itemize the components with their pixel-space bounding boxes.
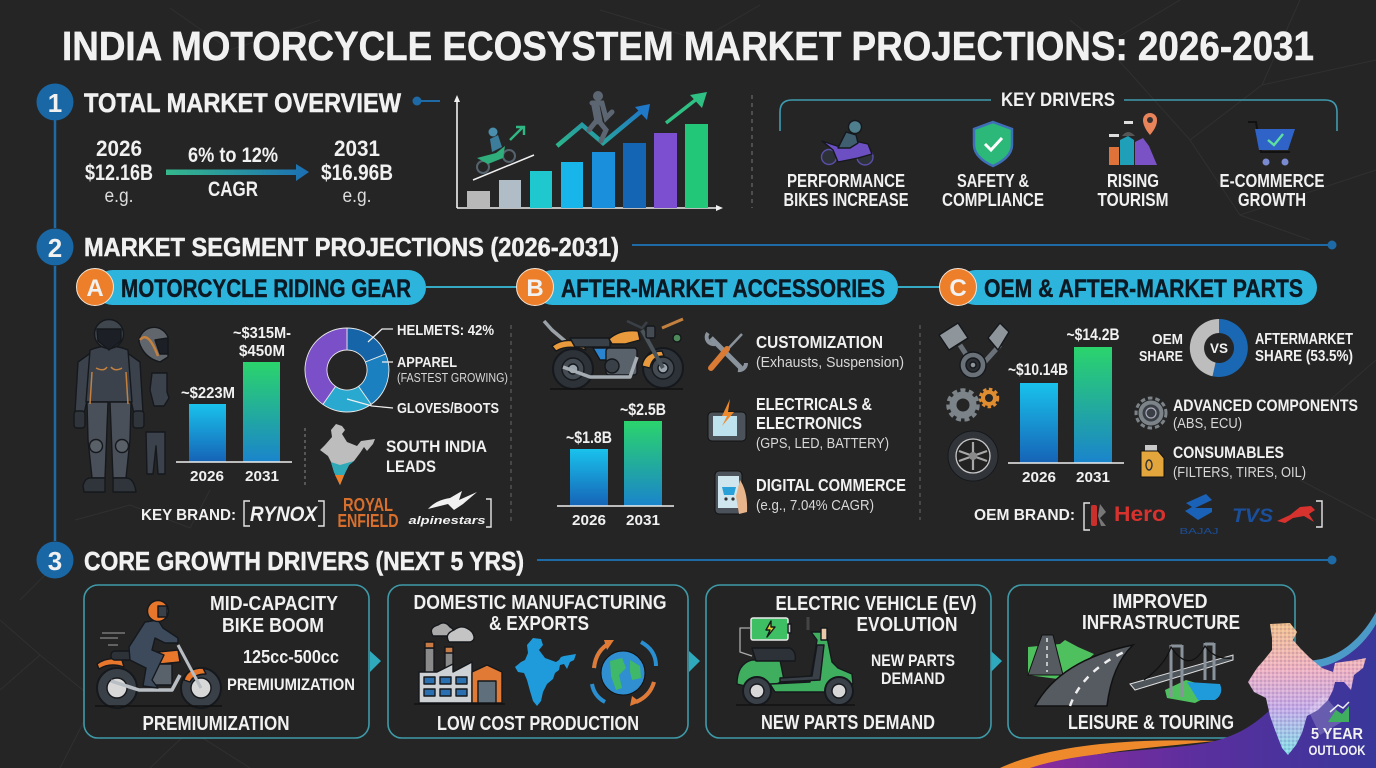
OEM brand row: OEM BRAND: <box>974 507 1075 524</box>
card: mid-capacity bike boom: MID-CAPACITY <box>210 593 339 615</box>
key brand row: KEY BRAND: <box>141 507 236 524</box>
CAGR arrow: CAGR <box>208 178 258 201</box>
icon: component gear <box>1136 398 1166 428</box>
customization item: (Exhausts, Suspension) <box>756 354 904 371</box>
section 3 rule <box>537 556 1336 564</box>
south india leads map: SOUTH INDIA <box>386 437 487 456</box>
card: improved infrastructure: IMPROVED <box>1112 591 1208 613</box>
consumables item <box>1141 443 1306 481</box>
driver: performance bikes: BIKES INCREASE <box>784 190 908 210</box>
accessories bar chart <box>557 401 674 529</box>
accessories bar chart: 2031 <box>626 513 660 529</box>
2026 value <box>85 136 153 207</box>
key drivers panel <box>780 90 1337 210</box>
brand: Hero <box>1091 503 1166 526</box>
section 1 badge <box>36 84 74 120</box>
icon: glove <box>150 373 169 406</box>
card: electric vehicle evolution: ELECTRIC VEHICLE (EV) <box>776 593 976 615</box>
brand: Alpinestars <box>408 491 486 527</box>
card: domestic manufacturing and exports: LOW COST PRODUCTION <box>437 713 639 735</box>
icon: factory <box>414 623 505 704</box>
CAGR arrow <box>166 144 309 201</box>
riding gear bar chart: 2026 <box>190 469 224 485</box>
parts bar chart: ~$14.2B <box>1066 326 1120 344</box>
panel C header: C <box>949 275 967 302</box>
brand: Bajaj <box>1180 494 1218 536</box>
key brand row <box>141 491 491 531</box>
riding gear bar chart <box>176 325 292 485</box>
panel A header: MOTORCYCLE RIDING GEAR <box>121 275 411 303</box>
2026 value: 2026 <box>96 136 142 161</box>
advanced components item: (ABS, ECU) <box>1173 416 1242 432</box>
riding gear bar chart: 2031 <box>245 469 279 485</box>
section 1: total market overview <box>36 84 723 211</box>
OEM vs aftermarket donut <box>1139 319 1353 377</box>
driver: rising tourism: TOURISM <box>1098 190 1168 210</box>
electricals item: ELECTRICALS & <box>756 394 872 414</box>
card: domestic manufacturing and exports: & EXPORTS <box>489 613 589 635</box>
driver: safety and compliance: COMPLIANCE <box>942 190 1044 210</box>
driver: rising tourism <box>1098 113 1168 210</box>
customization item <box>707 332 904 371</box>
driver: performance bikes <box>784 120 908 210</box>
card arrow 2 <box>689 651 700 672</box>
2031 value: 2031 <box>334 136 380 161</box>
accessories bar chart: ~$1.8B <box>566 429 612 447</box>
south india leads map: LEADS <box>386 457 436 476</box>
gear share donut chart: HELMETS: 42% <box>397 322 494 339</box>
brand: Hero: Hero <box>1114 503 1166 526</box>
OEM vs aftermarket donut: SHARE <box>1139 348 1183 365</box>
2031 value: e.g. <box>342 186 372 207</box>
riding gear bar chart: ~$315M- <box>233 325 291 342</box>
brand: Bajaj: BAJAJ <box>1180 526 1218 536</box>
OEM brand row <box>974 494 1322 536</box>
section 3: core growth drivers <box>36 542 1336 578</box>
card: improved infrastructure: INFRASTRUCTURE <box>1082 612 1240 634</box>
panel A header <box>76 268 426 306</box>
OEM vs aftermarket donut: AFTERMARKET <box>1255 331 1353 348</box>
icon: helmet <box>139 327 168 362</box>
card: electric vehicle evolution: NEW PARTS DEMAND <box>761 712 935 734</box>
gear share donut chart: APPAREL <box>397 354 457 371</box>
brand: TVS <box>1232 506 1315 527</box>
key drivers heading: KEY DRIVERS <box>1001 90 1115 111</box>
panel A header: A <box>86 275 104 302</box>
icon: highway roads <box>1028 635 1133 706</box>
card: electric vehicle evolution: NEW PARTS <box>871 651 955 670</box>
icon: oil jug <box>1141 445 1164 477</box>
card: electric vehicle evolution: EVOLUTION <box>856 614 958 636</box>
icon: phone with cart <box>715 471 747 514</box>
icon: rider on motorcycle <box>95 600 222 708</box>
riding gear bar chart: ~$223M <box>181 385 235 402</box>
icon: pants <box>146 432 165 474</box>
panel B header: AFTER-MARKET ACCESSORIES <box>561 275 885 303</box>
section 3 badge: 3 <box>48 546 62 576</box>
icon: tire <box>948 431 998 481</box>
OEM vs aftermarket donut: VS <box>1210 341 1228 356</box>
panel C header <box>940 268 1317 306</box>
driver: performance bikes: PERFORMANCE <box>787 171 905 191</box>
card: domestic manufacturing and exports: DOMESTIC MANUFACTURING <box>414 592 666 614</box>
card: improved infrastructure: LEISURE & TOURING <box>1068 712 1234 734</box>
brand: Royal Enfield: ROYAL <box>343 495 393 515</box>
corner swoosh with five year outlook <box>1000 612 1376 768</box>
2031 value <box>321 136 393 207</box>
south india leads map <box>320 424 487 485</box>
driver: safety and compliance: SAFETY & <box>957 171 1029 191</box>
icon: electric scooter with battery <box>736 617 855 705</box>
driver: e-commerce growth: GROWTH <box>1238 190 1306 210</box>
parts bar chart: 2026 <box>1022 470 1056 486</box>
timeline spine <box>54 120 56 541</box>
card arrow 3 <box>991 651 1002 672</box>
five year outlook label <box>1308 726 1366 758</box>
driver: e-commerce growth: E-COMMERCE <box>1220 171 1324 191</box>
card: mid-capacity bike boom: BIKE BOOM <box>222 615 324 637</box>
panel C: OEM and after-market parts <box>939 268 1358 536</box>
icon: bridge <box>1130 643 1233 703</box>
growth bar chart <box>454 91 723 211</box>
icon: custom motorcycle <box>544 319 683 389</box>
section 2 rule <box>632 240 1336 250</box>
heading connector <box>412 96 440 106</box>
icon: India map blue <box>515 638 576 706</box>
section 3 badge <box>36 542 74 578</box>
section 2 badge: 2 <box>48 233 62 263</box>
driver: rising tourism: RISING <box>1107 171 1159 191</box>
panel C header: OEM & AFTER-MARKET PARTS <box>984 275 1303 303</box>
brand: Royal Enfield <box>338 495 398 531</box>
parts bar chart: 2031 <box>1076 470 1110 486</box>
decorative corner wave <box>1000 612 1376 768</box>
brand: Royal Enfield: ENFIELD <box>338 511 398 531</box>
digital commerce item <box>715 471 906 514</box>
riding gear bar chart: $450M <box>239 343 285 360</box>
card: electric vehicle evolution: DEMAND <box>881 669 945 688</box>
section 3 heading: CORE GROWTH DRIVERS (NEXT 5 YRS) <box>84 546 524 576</box>
card: mid-capacity bike boom <box>84 585 369 738</box>
section 1 heading: TOTAL MARKET OVERVIEW <box>84 88 401 118</box>
gear share donut chart: (FASTEST GROWING) <box>397 371 508 385</box>
icon: globe with arrows <box>592 640 656 706</box>
parts bar chart: ~$10.14B <box>1008 361 1068 379</box>
icon: pointillist India map <box>1248 623 1366 755</box>
icon: rising arrow with runner <box>557 91 650 146</box>
electricals item: (GPS, LED, BATTERY) <box>756 435 889 452</box>
icon: wrench and screwdriver <box>707 333 746 370</box>
card: domestic manufacturing and exports <box>388 585 688 738</box>
2026 value: e.g. <box>104 186 134 207</box>
digital commerce item: DIGITAL COMMERCE <box>756 475 906 495</box>
icon: outlook mini chart <box>1308 695 1349 735</box>
gear share donut chart: GLOVES/BOOTS <box>397 400 499 417</box>
icon: gears <box>948 389 998 420</box>
brand: Alpinestars: alpinestars <box>408 515 486 527</box>
section 2: market segment projections <box>36 228 1336 266</box>
section 2 heading: MARKET SEGMENT PROJECTIONS (2026-2031) <box>84 232 619 262</box>
card arrow 1 <box>370 651 381 672</box>
icon: rider on ramp <box>473 127 534 180</box>
driver: safety and compliance <box>942 122 1044 210</box>
icon: pistons and crank <box>939 323 1009 378</box>
advanced components item <box>1136 396 1358 432</box>
panel B header <box>516 268 898 306</box>
icon: riding suit <box>74 320 144 492</box>
gear share donut chart <box>305 322 508 417</box>
consumables item: (FILTERS, TIRES, OIL) <box>1173 465 1306 481</box>
digital commerce item: (e.g., 7.04% CAGR) <box>756 497 874 514</box>
five year outlook label: 5 YEAR <box>1311 726 1363 743</box>
card: mid-capacity bike boom: PREMIUMIZATION <box>227 675 355 694</box>
electricals item <box>708 394 889 452</box>
panel B: after-market accessories <box>516 268 906 529</box>
card: improved infrastructure <box>1008 585 1295 738</box>
customization item: CUSTOMIZATION <box>756 332 883 352</box>
OEM vs aftermarket donut: SHARE (53.5%) <box>1255 348 1353 365</box>
key drivers bracket <box>780 100 1337 131</box>
2031 value: $16.96B <box>321 160 393 185</box>
brand: Rynox: RYNOX <box>250 503 319 526</box>
icon: green growth arrow <box>666 92 707 123</box>
brand: TVS: TVS <box>1232 506 1273 527</box>
section 2 badge <box>36 228 74 266</box>
consumables item: CONSUMABLES <box>1173 443 1284 462</box>
card: mid-capacity bike boom: PREMIUMIZATION <box>142 713 290 735</box>
accessories bar chart: 2026 <box>572 513 606 529</box>
2026 value: $12.16B <box>85 160 153 185</box>
OEM vs aftermarket donut: OEM <box>1152 331 1183 348</box>
card: mid-capacity bike boom: 125cc-500cc <box>243 647 339 667</box>
panel B header: B <box>526 275 544 302</box>
card: electric vehicle evolution <box>706 585 991 738</box>
section 1 badge: 1 <box>48 88 62 118</box>
CAGR arrow: 6% to 12% <box>188 144 278 167</box>
accessories bar chart: ~$2.5B <box>620 401 666 419</box>
electricals item: ELECTRONICS <box>756 413 862 433</box>
driver: e-commerce growth <box>1220 122 1324 210</box>
panel A: motorcycle riding gear <box>74 268 508 531</box>
icon: tablet with bolt <box>708 399 746 441</box>
parts bar chart <box>1008 326 1124 486</box>
